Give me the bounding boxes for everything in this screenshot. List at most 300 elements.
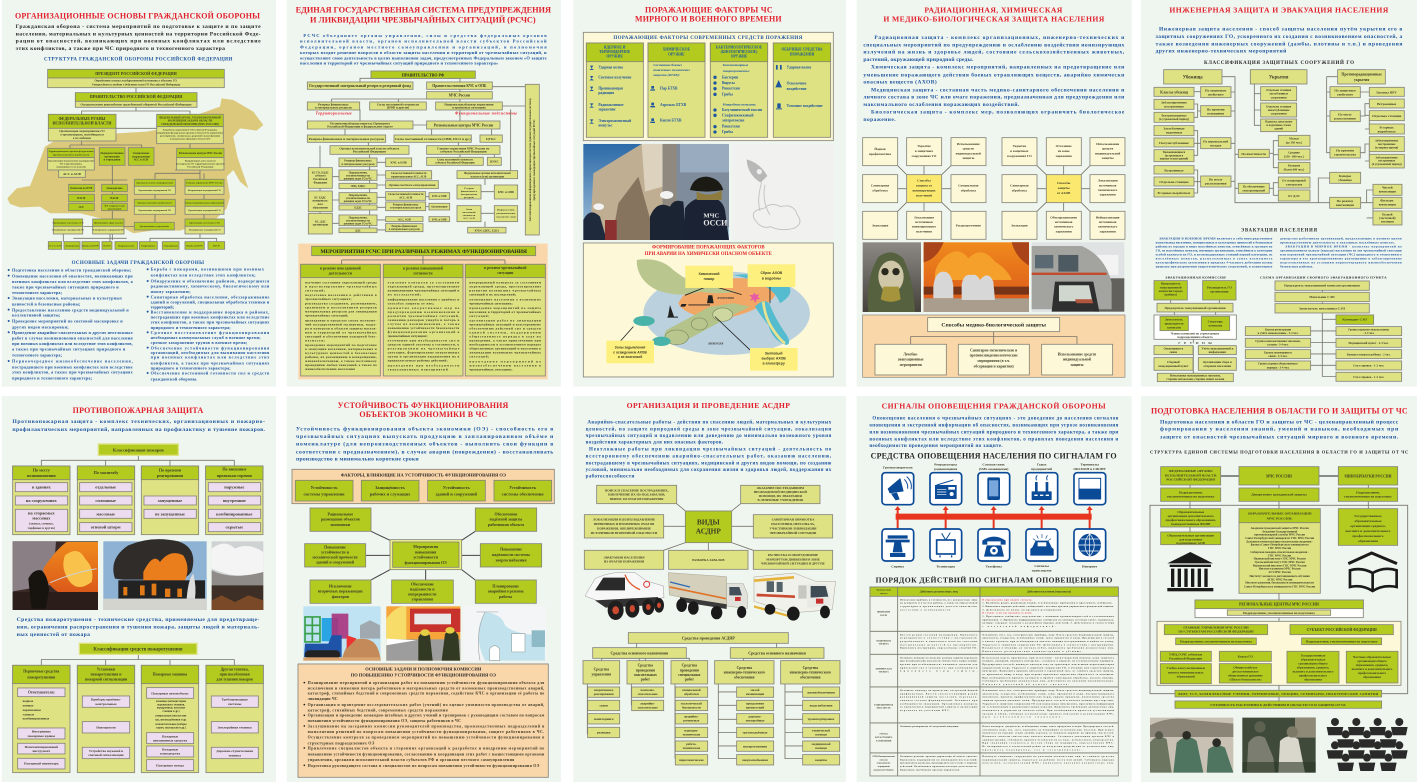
chart: assembly evacuation point organization: Комната матери и ребёнка - 2 чел.	[1347, 352, 1391, 356]
org chart: RSChS structure: Резервы финансовых	[391, 225, 418, 228]
text block: warning definition: оповещения и экстренной информации об опасностях, возникающих при угрозе возникновения	[869, 424, 1119, 429]
chart: evacuation commission: Оповещения и	[1163, 346, 1183, 350]
list: tasks, left column: Проведение аварийно-спасательных и других неотложных	[12, 330, 134, 335]
panel: RSChS activities by operating mode: хранением и восполнением резервов	[305, 306, 377, 310]
panel: RSChS activities by operating mode: ра и контроля в области защиты населе-	[305, 326, 377, 330]
diagram: chemical hazard zones: ИЗОТЕРМИЯ	[716, 297, 734, 300]
chart: classification of protective structures: По вертикальной	[1203, 139, 1228, 143]
panel: engineering protection and evacuation	[1141, 0, 1417, 387]
title: unified state system: И ЛИКВИДАЦИИ ЧРЕЗВЫЧАЙНЫХ СИТУАЦИЙ (РСЧС)	[310, 15, 536, 24]
diagram: measures to improve stability: экономики	[330, 522, 351, 527]
org chart: civil defense structure: Координация деятельности	[185, 159, 216, 162]
text block: protection definitions: Химическая защита - комплекс мероприятий, направленных на предотвращение или	[871, 64, 1125, 71]
org chart: civil defense structure: регулирование, специальные, разрешительные функции	[160, 135, 221, 138]
list: tasks, right column: срочное захоронение трупов в военное время;	[151, 340, 248, 345]
diagram: chemical hazard zones: Сброс АХОВ	[760, 271, 783, 275]
org chart: civil defense structure: органов исполнительной власти	[53, 153, 90, 156]
org chart: RSChS structure: ДДС	[355, 230, 361, 233]
org chart: civil defense structure: Подразделения	[118, 245, 135, 248]
chart: classification of protective structures: (в угрожаемый период)	[1372, 162, 1402, 166]
org chart: RSChS structure: ЭПЦ, ЕДЦС	[351, 185, 365, 188]
chart: fire classification: возникновения	[27, 473, 56, 478]
chart: classification of protective structures: сооружения	[1271, 95, 1287, 99]
chart: classification of protective structures: Заблаговременно	[1376, 155, 1398, 159]
illustration: EMERCOM covered truck	[668, 573, 747, 619]
panel: RSChS activities by operating mode: проведения, а также привлечению при	[469, 339, 541, 343]
org chart: RSChS structure: Организации	[431, 206, 448, 209]
org chart: RSChS structure: АСС, АСФ	[398, 218, 412, 221]
chart: fire classification: отдельные	[95, 485, 116, 490]
org chart: civil defense structure: НАСФ	[213, 245, 220, 248]
panel: medical and biological protection: противоэпидемиологические	[970, 354, 1018, 358]
org chart: RSChS structure: Резервы финансовых и материальных ресурсов	[309, 137, 384, 141]
list: tasks, left column: Предоставление населению средств индивидуальной и	[12, 307, 129, 312]
text block: fire protection definition: профилактических мероприятий, направленных на профилактику и тушение пожаров.	[12, 426, 266, 433]
photo: trainees in gas masks	[1242, 718, 1316, 773]
panel: damaging factors of modern weapons: Ударная волна	[787, 65, 811, 69]
text block: engineering protection definition	[1156, 26, 1403, 55]
diagram: measures to improve stability: Повышение	[324, 545, 346, 550]
diagram: ways of protection from ionizing radiation: профилактика	[869, 152, 891, 156]
org chart: RSChS structure: Российской Федерации в федеральном округе	[327, 125, 393, 129]
org chart: RSChS structure: МЧС России	[449, 94, 471, 98]
table: actions by warning signals: действий. Возобновить производственную деятельность.	[900, 765, 978, 768]
panel: population training in civil defense	[1141, 396, 1417, 782]
org chart: RSChS structure: решение задач ГО и ЧС	[344, 200, 372, 203]
panel: RSChS activities by operating mode: чрезвычайных ситуациях.	[469, 367, 513, 371]
chart: fire classification: торфяных и других)	[28, 526, 55, 530]
panel: damaging factors at a chemical accident: ФОРМИРОВАНИЕ ПОРАЖАЮЩИХ ФАКТОРОВ	[652, 246, 765, 251]
list: tasks, right column: гражданской обороны.	[151, 376, 197, 381]
chart: classification of protective structures: возведения	[1207, 111, 1224, 115]
chart: training system structure: ГОТОВНОСТЬ НАСЕЛЕНИЯ К ДЕЙСТВИЯМ В ОБЛАСТИ ГО И ЗАЩИТЫ ОТ ЧС	[1210, 702, 1347, 707]
org chart: RSChS structure: АСС, АСФ	[463, 217, 476, 220]
chart: assembly evacuation point organization: - 2-3 чел.	[1363, 331, 1375, 335]
diagram: ways of protection from ionizing radiation: источников	[915, 220, 933, 224]
chart: classification of protective structures: Возвышающиеся	[1163, 150, 1186, 154]
chart: classification of protective structures: свойствам	[1208, 92, 1224, 96]
table: actions by warning signals: Ввести режим световой маскировки. Выполнить	[900, 633, 978, 636]
panel: RSChS activities by operating mode: к эвакуации населения, материальных и	[305, 347, 377, 351]
table: actions by warning signals: Действия должностных лиц	[920, 590, 958, 594]
table: actions by warning signals: Отключить свет, газ, электрические приборы, воду. Взять средства индивидуальной защиты,	[982, 689, 1114, 692]
diagram: ways of protection from ionizing radiation: Укрытие	[917, 144, 931, 148]
chart: training system structure: Санкт-Петербургский университет ГПС МЧС России	[1245, 536, 1314, 540]
chart: classification of fire extinguishing means: Пожарные поезда	[156, 763, 184, 767]
panel: commission tasks and powers: Организация и проведение исследовательских работ (учений) по оценке уязвимости производства от аварий,	[308, 702, 544, 707]
panel: stability of economic facilities	[287, 396, 561, 782]
chart: evacuation commission: Секретарь	[1208, 319, 1223, 323]
panel: RSChS activities by operating mode: в режиме повседневной	[320, 267, 362, 271]
chart: evacuation commission: эвакуационный пункт	[1158, 364, 1189, 368]
text block: stability definition: чрезвычайных ситуациях выпускать продукцию в запланированном объёме и	[296, 433, 554, 440]
org chart: RSChS structure: Резервы финансовых	[344, 159, 372, 163]
org chart: RSChS structure: предупреждения и ликвидации чрезвычайных ситуаций РСЧС	[532, 119, 536, 201]
org chart: civil defense structure: Определяет основы государственной политики в области ГО.	[95, 78, 178, 83]
panel: damaging factors of modern weapons: Электромагнитный	[598, 119, 632, 123]
heading: main tasks of civil defense: ОСНОВНЫЕ ЗАДАЧИ ГРАЖДАНСКОЙ ОБОРОНЫ	[72, 260, 204, 266]
diagram: warning means icons	[882, 463, 1107, 573]
chart: classification of protective structures: первые этажи зданий)	[1160, 157, 1188, 161]
list: tasks, right column: конфликтов, а также при чрезвычайных ситуациях	[151, 360, 270, 365]
text block: civil defense definition: этих конфликтов, а также при ЧС природного и техногенного характера	[16, 45, 225, 52]
chart: training system structure: организации общего	[1357, 659, 1387, 663]
table: actions by warning signals: При необходимости принять антидоты и пройти санитарную обработку, оказать помощь.	[982, 676, 1114, 679]
diagram: ways of protection from hazardous chemicals: заражения	[1056, 154, 1072, 158]
text block: engineering protection definition: защитных сооружениях ГО, ускоренного их создания с возникновением опасностей, а	[1156, 33, 1403, 40]
diagram: warning means icons: Телефоны	[986, 565, 1002, 569]
panel: damaging factors of modern weapons: Вирусы	[722, 81, 735, 85]
chart: means of conducting rescue work: транспортировки	[808, 717, 834, 721]
org chart: civil defense structure: Планирование мероприятий ГО	[93, 229, 124, 232]
panel: factors affecting stability: Устойчивость	[509, 485, 537, 490]
map of Russia	[7, 98, 263, 233]
org chart: civil defense structure: НАСФ	[110, 197, 119, 200]
chart: fire classification: наружные	[224, 485, 244, 490]
panel: RSChS activities by operating mode: проведение мероприятий по защите	[469, 306, 541, 310]
text block: rescue work definition: пострадавшему в чрезвычайных ситуациях, медицинской и других видов помощи, по созданию	[586, 461, 831, 466]
chart: training system structure: КШУ, ТСУ, КОМПЛЕКСНЫЕ УЧЕНИЯ, ТРЕНИРОВКИ, ЛЕКЦИИ, СЕМИНАРЫ, ПРАКТИЧЕСКИЕ ЗАНЯТИЯ	[1178, 692, 1379, 696]
diagram: types of rescue work: РАЗБОРКА ЗАВАЛОВ	[692, 558, 725, 562]
list: tasks, right column: Обеспечение устойчивости функционирования	[151, 345, 270, 350]
org chart: civil defense structure: организации	[104, 155, 120, 158]
diagram: ways of protection from hazardous chemicals: химического	[1098, 188, 1118, 192]
diagram: types of rescue work: НЕОБХОДИМОЙ МЕДИЦИНСКОЙ	[754, 489, 807, 494]
chart: training system structure: Сибирская пожарно-спасательная академия -	[1250, 550, 1309, 554]
chart: classification of fire extinguishing means: порошковые	[23, 708, 42, 712]
heading: evacuation of the population: ЭВАКУАЦИЯ НАСЕЛЕНИЯ	[1241, 229, 1318, 234]
chart: means of conducting rescue work: механизации	[746, 692, 764, 696]
chart: means of conducting rescue work: защиты	[815, 758, 827, 762]
panel: damaging factors of modern weapons: ОРУЖИЕ	[668, 52, 685, 56]
chart: training system structure: Учебно-консультационные	[1166, 666, 1206, 670]
chart: classification of protective structures: Отдельно стоящие	[1266, 104, 1292, 108]
table: actions by warning signals: находиться в укрытии до сигнала отбоя. При необходимости провести дезактивацию	[982, 709, 1114, 712]
diagram: ways of protection from hazardous chemicals: Нейтрализация	[1096, 215, 1120, 219]
diagram: measures to improve stability: зданий и сооружений	[316, 560, 355, 565]
chart: training system structure: Уральский институт ГПС МЧС России	[1255, 560, 1305, 564]
chart: means of conducting rescue work: пожаротушения	[743, 744, 767, 748]
list: tasks, right column: Борьба с пожарами, возникшими при военных	[151, 267, 265, 272]
chart: classification of fire extinguishing means: Пожарные машины	[153, 672, 187, 676]
table: actions by warning signals: 1. Прослушать сообщение, передаваемое с помощью громкоговорителей и телевизионных	[982, 615, 1115, 618]
table: actions by warning signals: индивидуальной защиты, вернуться на рабочие места или домой. Соблюдать порядок	[982, 758, 1115, 761]
panel: RSChS activities by operating mode: проведению любых эвакуаций, а также по	[305, 363, 377, 367]
table: actions by warning signals: профилактики. Ввести соответствующий режим	[900, 692, 978, 695]
org chart: RSChS structure: организации	[313, 224, 328, 227]
chart: training system structure: профессионального	[1299, 673, 1327, 677]
table: actions by warning signals: отключить воду, газ, свет, выходить на ближайшие незатопляемые участки. При угрозе	[982, 728, 1114, 731]
panel: RSChS activities by operating mode: готовности	[413, 272, 433, 276]
chart: classification of fire extinguishing means: Приборы приёмно-	[91, 698, 122, 702]
panel: commission tasks and powers: управления, органами исполнительной власти субъектов РФ и органами местного самоуправления	[308, 757, 515, 762]
panel: civil defense warning signals	[857, 396, 1132, 782]
chart: classification of fire extinguishing means: вспомогательные (заборы	[155, 723, 187, 726]
text block: warning definition	[869, 417, 1119, 449]
table: actions by warning signals: Выполнить требования органов управления.	[900, 768, 960, 771]
panel: commission tasks and powers: повышению устойчивости функционирования, согласованию и координации этих работ с вышестоящими органами	[308, 751, 545, 756]
panel: factors affecting stability: Устойчивость	[443, 485, 471, 490]
chart: means of conducting rescue work: спасательных	[634, 673, 657, 677]
panel: RSChS activities by operating mode: общественных организаций и населения к	[469, 347, 541, 351]
org chart: civil defense structure: Комиссия ПУФ	[83, 245, 99, 248]
chart: classification of protective structures: По режиму	[1337, 199, 1354, 203]
icon: loudspeaker	[882, 473, 914, 505]
org chart: RSChS structure: Полномочный представитель Президента	[330, 121, 390, 125]
org chart: civil defense structure: Организации в сфере ведения	[94, 221, 124, 224]
org chart: civil defense structure: Территориальные органы федеральных	[48, 150, 94, 153]
chart: classification of protective structures: (частичной)	[1379, 216, 1395, 220]
text block: evacuation description: характера и его кратковременному размещению в заблаговременно	[1280, 256, 1402, 260]
list: tasks, left column: коллективной защиты;	[12, 313, 61, 318]
panel: damaging factors of modern weapons: Ботулинический токсин	[722, 108, 763, 112]
org chart: RSChS structure: Органы местного самоуправления	[389, 183, 436, 187]
panel: commission tasks and powers: Привлечение специалистов объекта и сторонних организаций к разработке и внедрению мероприятий по	[308, 746, 544, 751]
chart: means of conducting rescue work: Средства основного назначения	[748, 650, 807, 655]
diagram: measures to improve stability: Рациональное	[327, 511, 353, 516]
panel: medical and biological protection: защиты	[1070, 363, 1084, 367]
table: actions by warning signals: радиационной защиты населения, персонала,	[900, 696, 978, 699]
table: actions by warning signals: гражданской обороны	[874, 768, 894, 771]
diagram: warning means icons: Сигналы	[1034, 564, 1049, 568]
org chart: civil defense structure: Комиссия по ПУФ	[70, 187, 93, 190]
chart: means of conducting rescue work: малой	[751, 688, 760, 692]
chart: classification of protective structures: электросети	[1286, 182, 1303, 186]
chart: fire classification: на сооружениях	[26, 498, 58, 503]
panel: RSChS activities by operating mode: принятие оперативных мер по	[388, 306, 460, 310]
diagram: measures to improve stability: факторов	[332, 594, 350, 599]
org chart: RSChS structure: Силы постоянной готовности (СВФ, ПСО и др.)	[395, 137, 470, 141]
org chart: civil defense structure: Организации, отнесённые к ГО	[189, 222, 220, 224]
chart: training system structure: образования	[1304, 677, 1322, 681]
table: actions by warning signals: при возникновении опасности. Оповестить вышестоящие	[900, 660, 977, 663]
table: actions by warning signals: с полученной информацией.	[982, 625, 1056, 628]
chart: training system structure: Воронежский институт ГПС МЧС России	[1253, 563, 1307, 567]
org chart: RSChS structure: Силы постоянной готовности	[377, 102, 419, 106]
chart: means of conducting rescue work	[583, 633, 840, 765]
chart: training system structure: детско-юношеское	[1232, 669, 1259, 673]
diagram: ways of protection from ionizing radiation: Способы	[917, 179, 931, 183]
list: tasks, left column: техногенного характера;	[12, 290, 63, 295]
chart: classification of fire extinguishing means: основные (автоцистерны	[156, 700, 186, 703]
chart: classification of protective structures: и подземные этажи	[1266, 123, 1291, 127]
icons: factor markers	[589, 65, 782, 134]
org chart: RSChS structure: и материальных ресурсов	[315, 106, 352, 110]
org chart: RSChS structure: (КЧФ и другие)	[387, 106, 409, 110]
list: tasks, left column: других видов маскировки;	[12, 324, 69, 329]
diagram: ways of protection from ionizing radiation: Локализация	[914, 215, 934, 219]
panel: factors affecting stability: Устойчивость	[310, 485, 338, 490]
panel: medical and biological protection: Лечебно-	[903, 352, 919, 356]
chart: classification of protective structures: Камеры	[1339, 174, 1351, 178]
table: actions by warning signals: УГРОЗА	[879, 733, 888, 736]
panel: damaging factors of modern weapons: Бактерии	[722, 76, 739, 80]
title: fire protection: ПРОТИВОПОЖАРНАЯ ЗАЩИТА	[73, 406, 204, 415]
diagram: types of rescue work: В ЛЕЧЕБНЫЕ УЧРЕЖДЕНИЯ	[758, 498, 804, 502]
diagram: warning means icons: Интернет	[1082, 565, 1098, 569]
chart: training system structure: подведомственные ФОИВ	[1171, 522, 1211, 526]
diagram: types of rescue work: ЛОКАЛИЗАЦИЯ И (ИЛИ) ПОДАВЛЕНИЕ	[593, 518, 655, 522]
text block: evacuation description: прорыва при разрушении гидротехнических сооружений, и планомерное	[1156, 264, 1273, 268]
chart: classification of protective structures: (в мирное время)	[1375, 146, 1398, 150]
diagram: chemical hazard zones: с осаждением АХОВ	[613, 350, 647, 354]
list: tasks, right column: пострадавших при военных конфликтах или вследствие	[151, 314, 269, 319]
chart: classification of protective structures: вентиляции	[1379, 190, 1396, 194]
table: actions by warning signals: материальных ценностей на предприятии.	[900, 643, 978, 646]
org chart: civil defense structure: Организации, отнесённые к ГО	[53, 222, 84, 224]
table: actions by warning signals: Подаваемый	[876, 589, 891, 592]
diagram: ways of protection from hazardous chemicals: из зоны	[1058, 149, 1070, 153]
text block: protection definitions: максимального ослабления поражающих воздействий.	[863, 101, 1020, 108]
table: actions by warning signals: территории и организациях довести оповещение	[900, 605, 977, 608]
chart: fire classification: запущенные	[158, 498, 182, 503]
chart: evacuation commission: председателя	[1165, 321, 1184, 325]
diagram: measures to improve stability: Исключение	[329, 583, 352, 588]
org chart: civil defense structure: Главные управления МЧС России	[186, 182, 223, 185]
table: actions by warning signals: Покинуть защитные сооружения по указанию должностных лиц, не снимать средства	[982, 755, 1115, 758]
text block: protection definitions	[863, 35, 1125, 123]
diagram: ways of protection from hazardous chemicals: от АХОВ	[1057, 191, 1071, 195]
chart: classification of protective structures: расположения	[1205, 182, 1227, 186]
title: damaging factors	[635, 5, 782, 24]
title: stability of economic facilities: УСТОЙЧИВОСТЬ ФУНКЦИОНИРОВАНИЯ	[338, 401, 509, 410]
panel: damaging factors of modern weapons: БАКТЕРИОЛОГИЧЕСКОЕ	[716, 46, 763, 50]
diagram: ways of protection from hazardous chemicals: источников	[1099, 183, 1117, 187]
panel: RSChS activities by operating mode: подготовка населения к действиям в	[305, 293, 377, 297]
panel: RSChS activities by operating mode: чрезвычайных ситуаций и всестороннему	[469, 323, 541, 327]
panel: damaging factors of modern weapons: ЯДЕРНОЕ И	[604, 46, 626, 50]
table: actions by warning signals: При эвакуации следовать к местам сбора по маршруту, определённому КЧС.	[982, 742, 1114, 745]
chart: evacuation commission: комиссии	[1167, 325, 1181, 329]
diagram: types of rescue work: АСДНР	[696, 527, 721, 536]
panel: RSChS activities by operating mode	[298, 244, 548, 379]
panel: factors affecting stability: рабочих и служащих	[370, 492, 411, 497]
chart: means of conducting rescue work: грузоподъёмные	[743, 731, 768, 735]
chart: assembly evacuation point organization: Группа укрытия эвакоколонны	[1348, 327, 1390, 331]
diagram: ways of protection from ionizing radiation: сооружениях ГО	[912, 154, 937, 158]
panel: damaging factors of modern weapons: заражение	[598, 108, 616, 112]
panel: RSChS activities by operating mode: районы, их размещению и возвращению,	[305, 355, 377, 359]
diagram: chemical hazard zones: в атмосферу	[763, 362, 785, 366]
panel: damaging factors of modern weapons: Осколочное	[787, 82, 807, 86]
text block: evacuation description: безопасных районах.	[1280, 264, 1314, 268]
chart: classification of fire extinguishing means: приспособленная	[220, 672, 250, 676]
chart: training system structure: Подразделения, уполномоченные на подготовку	[1243, 611, 1315, 615]
panel: damaging factors of modern weapons: энтеротоксин	[722, 119, 745, 123]
list: tasks, left column: Проведение мероприятий по световой маскировке и	[12, 319, 123, 324]
chart: training system structure: образования, среднего,	[1356, 663, 1388, 667]
text block: evacuation description: или вероятной чрезвычайной ситуации (ЧС) природного и техногенного	[1280, 252, 1402, 256]
panel: RSChS activities by operating mode: ситуаций;	[469, 355, 489, 359]
table: actions by warning signals: защиты органов дыхания, кожи. Предупредить соседей и оказать помощь престарелым.	[982, 699, 1114, 702]
table: actions by warning signals: направлению ветра. Укрыться в защитном сооружении ГО, в убежище или герметизировать	[982, 666, 1115, 669]
chart: training system structure: ГЛАВНЫЕ УПРАВЛЕНИЯ МЧС РОССИИ	[1183, 626, 1249, 630]
diagram: types of rescue work: ИЗ ОЧАГОВ ПОРАЖЕНИЯ	[604, 560, 645, 564]
chart: classification of protective structures: (в угрожаемый период)	[1159, 117, 1189, 121]
chart: training system structure: ГПС МЧС России	[1268, 553, 1292, 557]
org chart: RSChS structure: финансовых и	[461, 190, 478, 193]
illustration: bulldozer at collapsed buildings	[303, 606, 381, 661]
org chart: civil defense structure: Организация мероприятия ГО	[59, 129, 105, 133]
text block: warning definition: Оповещение населения о чрезвычайных ситуациях - это доведение до населения сигналов	[872, 417, 1119, 422]
chart: fire classification: внутренние	[223, 498, 246, 503]
chart: classification of fire extinguishing means: Пожарный инвентарь	[24, 762, 59, 766]
chart: classification of fire extinguishing means: газовые	[23, 712, 35, 716]
diagram: ways of protection from hazardous chemicals: заражения	[1056, 229, 1072, 233]
chart: means of conducting rescue work: обеспечения	[734, 675, 755, 679]
chart: training system structure: противопожарной службы МЧС России	[1254, 533, 1305, 537]
diagram: ways of protection from ionizing radiation: излучения	[916, 229, 932, 233]
panel: organization of rescue and urgent work	[573, 396, 846, 782]
org chart: civil defense structure: Эвакоорганы	[65, 245, 79, 248]
diagram: ways of protection from hazardous chemicals: источников	[1099, 220, 1117, 224]
list: tasks, right column: этих конфликтов, а также при чрезвычайных ситуациях	[151, 320, 270, 325]
panel: RSChS activities by operating mode: чрезвычайных ситуациях;	[469, 301, 513, 305]
chart: training system structure: Академия гражданской защиты МЧС России	[1251, 526, 1309, 530]
table: actions by warning signals: Ожидать указаний об отмене сигнала.	[982, 683, 1069, 686]
list: tasks, left column: этих конфликтов, а также при чрезвычайных ситуациях	[12, 370, 134, 375]
table: actions by warning signals: органы при необходимости; включить сигналы для	[900, 663, 978, 666]
org chart: civil defense structure: Региональные центры МЧС России	[179, 152, 222, 155]
list: tasks, left column: при военных конфликтах или вследствие этих конфликтов,	[12, 341, 133, 346]
chart: classification of protective structures: Группы ПРУ	[1376, 90, 1397, 94]
chart: classification of protective structures: По защитным	[1205, 88, 1227, 92]
org chart: civil defense structure: и контрольные функции в области ГО	[170, 138, 210, 141]
list: tasks, left column: природного и техногенного характера;	[12, 375, 93, 380]
org chart: RSChS structure: уполномоченные на	[346, 174, 371, 177]
chart: means of conducting rescue work: подводно-	[684, 728, 698, 732]
diagram: measures to improve stability: непрерывности	[408, 591, 437, 596]
chart: means of conducting rescue work: спасательные	[638, 692, 658, 696]
chart: means of conducting rescue work: работо-	[686, 742, 697, 746]
chart: classification of protective structures: Отдельно стоящие	[1372, 114, 1402, 118]
chart: classification of protective structures: Чистой	[1382, 186, 1393, 190]
panel: RSChS activities by operating mode: ситуации, формирование оперативных	[388, 351, 460, 355]
diagram: types of rescue work: ПОМОЩИ, ИХ ЭВАКУАЦИЯ	[759, 494, 803, 498]
text block: RSChS description: исполнительной власти, органов исполнительной власти субъектов Российской	[300, 39, 547, 44]
chart: means of conducting rescue work: управления	[592, 673, 611, 677]
text block: evacuation description: особой важности по ГО, и железнодорожных станций первой категории, из	[1156, 252, 1273, 256]
chart: training system structure: для подготовки	[1179, 537, 1202, 541]
diagram: ways of protection from hazardous chemicals: сооружениях ГО	[1007, 154, 1032, 158]
title: engineering protection and evacuation: ИНЖЕНЕРНАЯ ЗАЩИТА И ЭВАКУАЦИЯ НАСЕЛЕНИЯ	[1169, 5, 1389, 14]
chart: classification of fire extinguishing means: Огнетушители:	[28, 691, 55, 695]
diagram: types of rescue work: ВЫНОС ИЗ ОЧАГОВ ПОРАЖЕНИЯ	[610, 497, 664, 501]
org chart: civil defense structure: Утверждает и вводит в действие план ГО Российской Федерации	[92, 81, 181, 86]
org chart: civil defense structure: Территориал.	[141, 245, 156, 248]
panel: RSChS activities by operating mode: деятельности	[329, 272, 353, 276]
diagram: warning means icons: Терминалы	[1080, 463, 1099, 467]
table: actions by warning signals: ТРЕВОГА	[879, 671, 889, 674]
chart: fire classification: не запущенные	[155, 511, 185, 516]
diagram: measures to improve stability: надёжности системы	[492, 552, 530, 557]
panel: RSChS activities by operating mode: их последствий;	[388, 293, 421, 297]
org chart: civil defense structure: Специальные	[133, 152, 150, 155]
diagram: ways of protection from ionizing radiation: ионизирующего	[912, 225, 936, 229]
chart: classification of protective structures: Отдельно стоящие	[1266, 88, 1292, 92]
panel: damaging factors of modern weapons: воздействие	[787, 87, 807, 91]
org chart: RSChS structure: и материальных ресурсов	[389, 228, 420, 231]
list: tasks, left column: а также при чрезвычайных ситуациях природного и	[12, 347, 126, 352]
chart: classification of fire extinguishing means: авиационные средства	[153, 738, 187, 742]
org chart: RSChS structure: Федерации	[314, 181, 327, 184]
text block: rescue work definition: чрезвычайных ситуаций и подавлению или доведению до минимально возможного уровня	[586, 434, 832, 439]
diagram: ways of protection from hazardous chemicals: Отселение	[1056, 144, 1072, 148]
text block: evacuation description: населённых пунктов, расположенных в зонах возможного	[1156, 256, 1273, 260]
panel: damaging factors of modern weapons: Капли БТХВ	[660, 119, 682, 123]
diagram: measures to improve stability: размещение объектов	[321, 517, 361, 522]
chart: assembly evacuation point organization: СХЕМА ОРГАНИЗАЦИИ СБОРНОГО ЭВАКУАЦИОННОГО ПУНКТА	[1260, 276, 1387, 280]
